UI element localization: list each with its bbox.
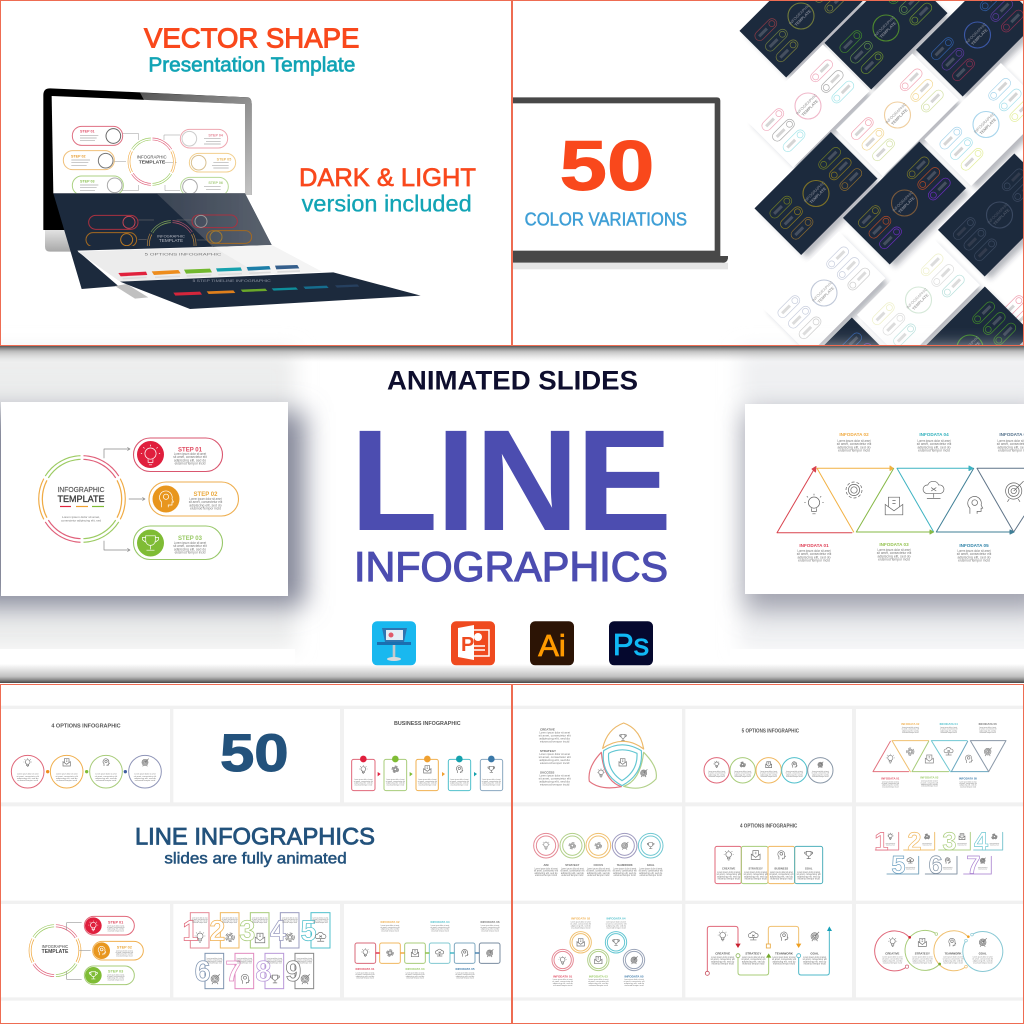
card: rounded squares timeline: INFODATA 06 [480, 920, 500, 924]
card: 4 options boxes: BUSINESS [775, 866, 788, 870]
card: wave of rings: INFODATA 05 [624, 974, 644, 978]
dark slide front: 5 STEP TIMELINE INFOGRAPHIC [192, 279, 271, 283]
subheading: slides are fully animated: slides are fully animated [164, 851, 347, 868]
heading: animated slides: ANIMATED SLIDES [387, 366, 638, 396]
ring dashes and text: consectetur adipiscing elit, sed [61, 518, 101, 522]
card: 4 options boxes: GOAL [805, 866, 813, 870]
monitor mockup: STEP 06 [208, 181, 223, 185]
triangle line chain [777, 466, 1024, 534]
ring title [58, 485, 105, 505]
card: numbers 1 to 7: 1 [874, 828, 888, 856]
card: stepped path: CREATIVE [715, 951, 730, 955]
card: numbers 1 to 7: 4 [974, 828, 988, 856]
card: interlocking circles: GOAL [979, 951, 987, 955]
title: LINE: LINE [350, 400, 672, 561]
card: double ring chain: FOCUS [594, 863, 603, 867]
monitor mockup: STEP 05 [217, 157, 231, 161]
card: 4 options boxes [715, 824, 823, 884]
card: step slide thumbnail: INFOGRAPHIC [42, 944, 68, 949]
card: shield triple [539, 723, 656, 788]
card: step slide thumbnail: STEP 02 [117, 946, 132, 950]
slanted colour variation cards [740, 1, 1023, 345]
card: shield triple: STRATEGY [540, 749, 556, 753]
card: business infographic: BUSINESS INFOGRAPHIC [394, 721, 461, 727]
card: numbered columns 1 to 9: 4 [270, 916, 286, 948]
card: numbers 1 to 7: 7 [966, 851, 980, 879]
step 02 [149, 482, 238, 516]
card: 4 options circles: 4 OPTIONS INFOGRAPHIC [51, 723, 121, 729]
subheading: presentation template: Presentation Template [148, 55, 355, 77]
callout: dark and light: DARK & LIGHT [299, 164, 476, 192]
card: wave of rings: INFODATA 01 [553, 974, 573, 978]
step 03 [134, 526, 222, 560]
monitor mockup: STEP 04 [208, 133, 224, 137]
panel: color variations [513, 1, 1023, 345]
card: double ring chain: STRATEGY [565, 863, 580, 867]
card: double ring chain [534, 833, 663, 877]
grid backing [513, 706, 1023, 1001]
panel: step slide card [1, 402, 288, 596]
card: numbered columns 1 to 9: 2 [209, 916, 225, 948]
icon: illustrator: Ai [538, 628, 566, 663]
card: triangle chain: INFODATA 03 [920, 776, 939, 780]
card: numbers 1 to 7: 6 [929, 851, 943, 879]
monitor stand foot [115, 284, 148, 299]
card: 4 options boxes: CREATIVE [722, 866, 736, 870]
panel: slide overview right [513, 706, 1023, 1001]
card: interlocking circles: TEAMWORK [945, 951, 962, 955]
card: double ring chain: TEAMWORK [617, 863, 633, 867]
icon: keynote [372, 621, 416, 665]
card: numbered columns 1 to 9: 8 [255, 956, 271, 988]
panel: vector shape presentation template [43, 23, 476, 309]
color variations label: COLOR VARIATIONS [525, 209, 687, 230]
dark slide front [120, 272, 421, 309]
monitor mockup [43, 88, 252, 252]
card: wave of rings: INFODATA 04 [606, 916, 626, 920]
heading: vector shape: VECTOR SHAPE [144, 23, 359, 54]
card: 5 options circles [704, 728, 833, 783]
panel: slide overview left [1, 706, 511, 1001]
card: numbered columns 1 to 9: 9 [285, 956, 301, 988]
monitor mockup: STEP 02 [71, 154, 86, 158]
icon: photoshop [609, 621, 653, 665]
card: rounded squares timeline: INFODATA 02 [380, 920, 400, 924]
card: numbered columns 1 to 9: 5 [301, 916, 317, 948]
dark slide [53, 193, 272, 289]
icon: powerpoint: P [461, 634, 474, 656]
card: 4 options boxes: STRATEGY [749, 866, 763, 870]
card: step slide thumbnail: STEP 03 [108, 970, 123, 974]
segmented ring [40, 458, 124, 540]
step 01 [134, 438, 222, 472]
card: numbered columns 1 to 9 [182, 913, 330, 989]
card: numbers 1 to 7: 5 [891, 851, 905, 879]
monitor mockup: STEP 01 [80, 130, 95, 134]
card: triangle chain [873, 722, 1006, 788]
info data labels: INFODATA 01 [799, 543, 829, 548]
card: stepped path: GOAL [810, 951, 819, 955]
card: rounded squares timeline: INFODATA 05 [455, 967, 475, 971]
ring dashes and text [60, 506, 104, 522]
card: interlocking circles: CREATIVE [885, 951, 899, 955]
card: numbers 1 to 7: 3 [942, 828, 956, 856]
card: interlocking circles: STRATEGY [915, 951, 930, 955]
card: triangle chain: INFODATA 06 [979, 722, 997, 726]
step 01: STEP 01 [178, 446, 202, 454]
card: numbered columns 1 to 9: 7 [225, 956, 241, 988]
card: double ring chain: AIM [544, 863, 549, 867]
card: 5 options circles: 5 OPTIONS INFOGRAPHIC [742, 728, 799, 734]
ring title: INFOGRAPHIC [58, 485, 105, 494]
card: number 50: 50 [220, 724, 289, 783]
monitor mockup: TEMPLATE [139, 160, 166, 166]
card: numbered columns 1 to 9: 3 [239, 916, 255, 948]
title: INFOGRAPHICS: INFOGRAPHICS [354, 543, 668, 590]
card: wave of rings: INFODATA 03 [589, 974, 608, 978]
card: triangle chain: INFODATA 02 [901, 722, 920, 726]
grid backing [1, 706, 511, 1001]
dark slide: TEMPLATE [159, 238, 183, 243]
ring title: TEMPLATE [58, 494, 104, 505]
card: step slide thumbnail: TEMPLATE [42, 949, 69, 955]
card: triangle chain: INFODATA 05 [959, 776, 977, 780]
light slide: 5 OPTIONS INFOGRAPHIC [145, 252, 221, 257]
card: stepped path: TEAMWORK [775, 951, 794, 955]
panel: triangle slide card [745, 404, 1024, 594]
card: stepped path: STRATEGY [745, 951, 761, 955]
number 50: 50 [560, 126, 654, 205]
info data text [797, 439, 1024, 563]
card: rounded squares timeline: INFODATA 03 [405, 967, 425, 971]
card: interlocking circles [875, 930, 1003, 971]
card: numbers 1 to 7 [874, 828, 1003, 879]
monitor mockup: INFOGRAPHIC [137, 155, 167, 160]
info data labels: INFODATA 05 [959, 543, 989, 548]
card: numbered columns 1 to 9: 6 [195, 956, 211, 988]
info data labels: INFODATA 02 [839, 432, 869, 437]
callout: version included: version included [302, 191, 472, 217]
icon: photoshop: Ps [613, 627, 649, 662]
card: wave of rings [552, 916, 645, 987]
line icons [804, 481, 1024, 515]
card: step slide thumbnail [30, 916, 143, 985]
dark slide: INFOGRAPHIC [157, 233, 185, 238]
heading: line infographics: LINE INFOGRAPHICS [135, 824, 375, 851]
ring dashes and text: Lorem ipsum dolor sit amet, [62, 515, 100, 519]
soft backdrop shadows [0, 346, 1024, 684]
card: triangle chain: INFODATA 04 [940, 722, 958, 726]
card: rounded squares timeline: INFODATA 04 [430, 920, 450, 924]
card: rounded squares timeline: INFODATA 01 [355, 967, 375, 971]
card: business infographic [352, 721, 503, 791]
card: rounded squares timeline [355, 920, 500, 980]
icon: illustrator [530, 621, 574, 665]
card: wave of rings: INFODATA 02 [571, 916, 591, 920]
card: stepped path [705, 926, 832, 975]
info data labels: INFODATA 04 [919, 432, 949, 437]
info data labels: INFODATA 03 [879, 542, 909, 547]
light slide [78, 245, 322, 282]
step 02: STEP 02 [194, 491, 218, 498]
step 03: STEP 03 [178, 535, 202, 542]
info data labels [799, 432, 1024, 548]
monitor mockup: STEP 03 [80, 179, 95, 183]
connector arrows [104, 448, 145, 552]
laptop mockup [512, 97, 728, 269]
card: 4 options boxes: 4 OPTIONS INFOGRAPHIC [740, 824, 797, 830]
card: shield triple: SUCCESS [540, 770, 554, 774]
panel: animated slides hero band [0, 346, 1024, 684]
card: double ring chain: GOAL [647, 863, 655, 867]
card: 4 options circles [11, 723, 161, 788]
card: triangle chain: INFODATA 01 [881, 776, 900, 780]
card: numbered columns 1 to 9: 1 [182, 916, 198, 948]
icon: powerpoint [451, 621, 495, 665]
card: shield triple: CREATIVE [540, 728, 555, 732]
card: step slide thumbnail: STEP 01 [108, 921, 124, 925]
card: numbers 1 to 7: 2 [907, 828, 921, 856]
